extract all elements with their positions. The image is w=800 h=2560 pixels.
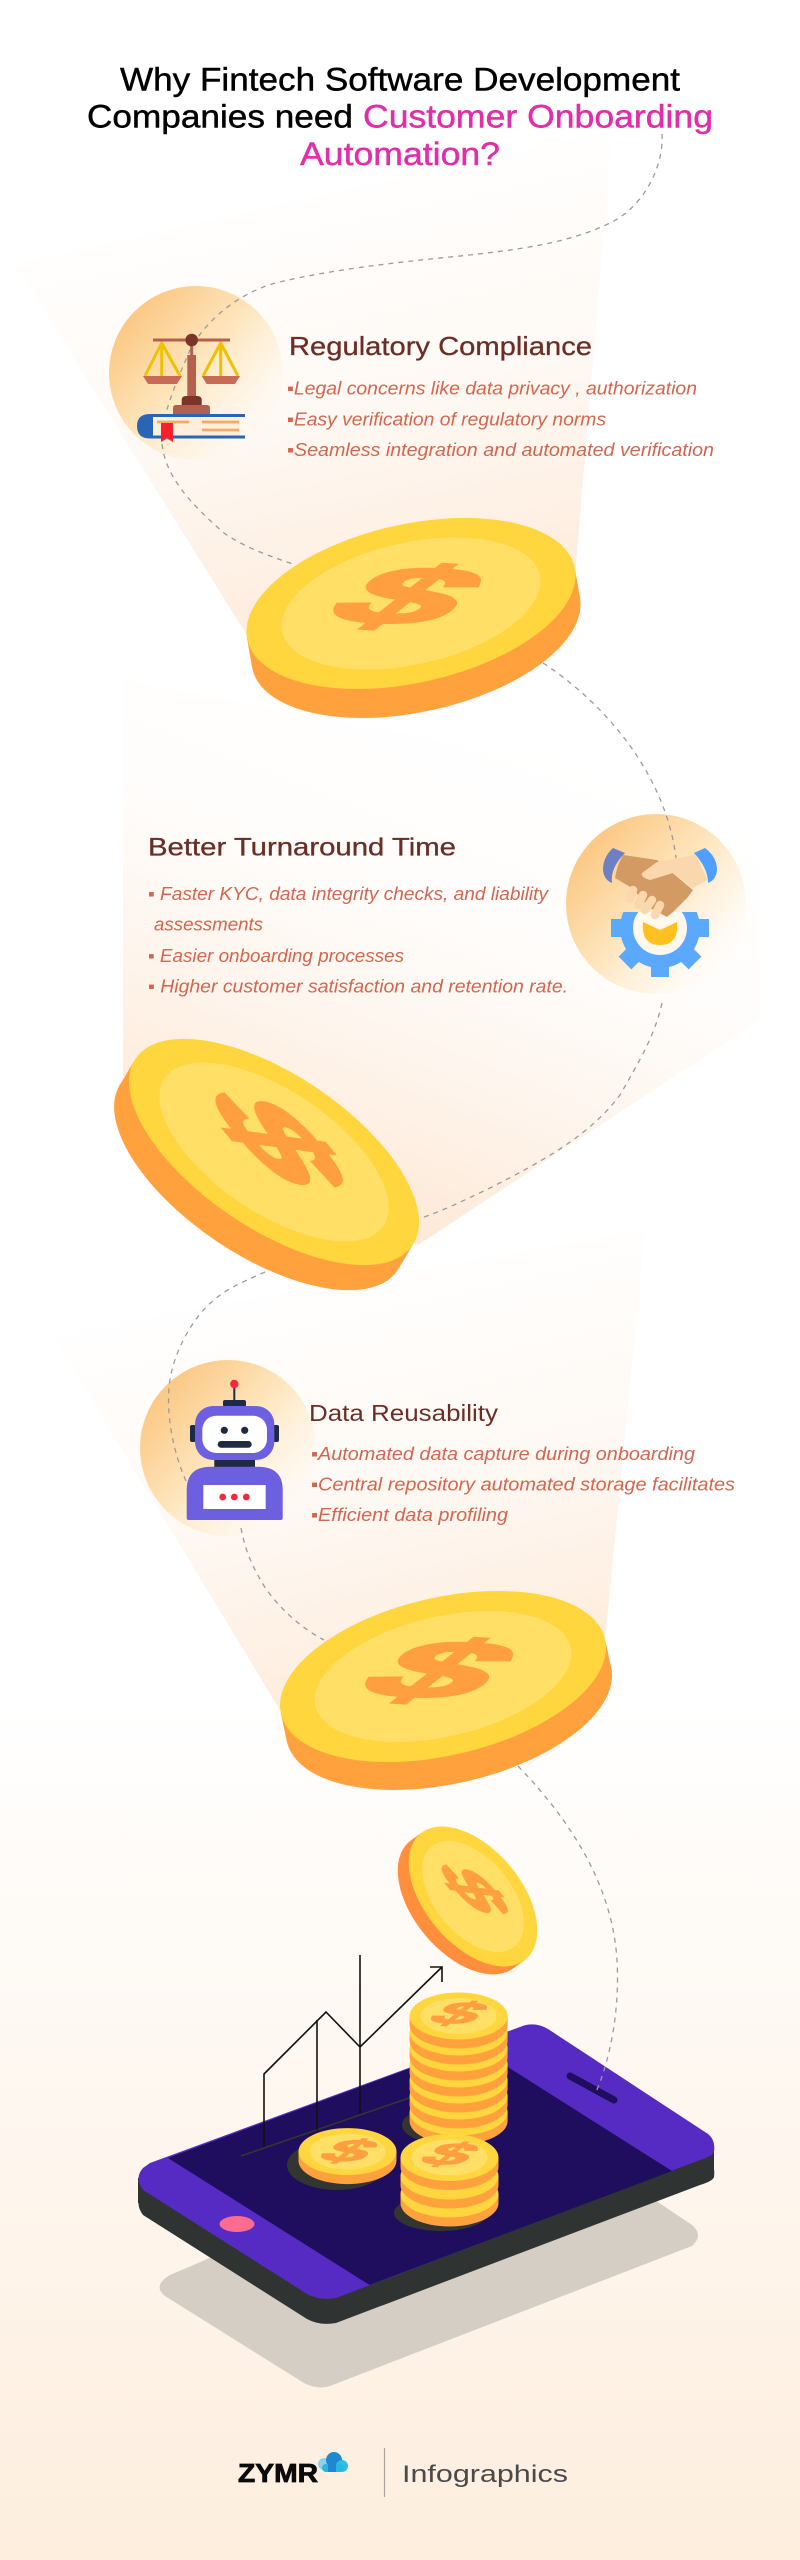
coin 1 [229, 490, 598, 746]
text block: Regulatory Compliance: ▪Seamless integration and automated verification [287, 440, 714, 460]
footer logo: ZYMR Infographics: Infographics [402, 2461, 568, 2488]
text block: Better Turnaround Time: ▪ Higher customer satisfaction and retention rate. [148, 976, 568, 996]
falling coin: $ [419, 1861, 530, 1919]
text block: Better Turnaround Time: ▪ Faster KYC, data integrity checks, and liability [148, 884, 549, 904]
short coin stack: $ [407, 2136, 494, 2172]
coin stack shadows [287, 2107, 488, 2231]
dashed connector to phone [518, 1766, 618, 2092]
title: Why Fintech Software Development [120, 62, 680, 98]
coin 2: $ [172, 1086, 387, 1197]
text block: Data Reusability [309, 1400, 735, 1525]
coin 3: $ [327, 1622, 554, 1717]
falling coin [373, 1802, 562, 1999]
icon: handshake with gear [603, 848, 717, 977]
short coin stack [400, 2134, 498, 2226]
tall coin stack: $ [416, 1995, 503, 2031]
icon backdrop circle 3 [140, 1360, 316, 1536]
single flat coin: $ [306, 2133, 393, 2169]
single flat coin [298, 2128, 396, 2184]
coin 2 [76, 995, 457, 1334]
icon backdrop circle 2 [566, 814, 746, 994]
light beam 3 [51, 1230, 645, 1710]
text block: Better Turnaround Time [148, 834, 568, 996]
text block: Regulatory Compliance: ▪Legal concerns like data privacy , authorization [287, 378, 697, 398]
icon: robot [187, 1380, 283, 1520]
text block: Better Turnaround Time: Better Turnaround Time [148, 834, 456, 862]
light beam 1 [15, 130, 612, 640]
title: Automation? [300, 136, 500, 172]
text block: Data Reusability: ▪Efficient data profiling [311, 1505, 508, 1525]
text block: Data Reusability: Data Reusability [309, 1400, 499, 1426]
line chart with arrow [241, 1955, 442, 2156]
title: Companies need [87, 98, 353, 134]
text block: Regulatory Compliance: ▪Easy verification of regulatory norms [287, 410, 606, 430]
text block: Better Turnaround Time: assessments [154, 914, 263, 934]
icon: scales of justice on a book [137, 334, 245, 442]
text block: Data Reusability: ▪Automated data capture during onboarding [311, 1444, 695, 1464]
text block: Regulatory Compliance [287, 331, 714, 460]
footer logo: ZYMR Infographics: ZYMR [238, 2458, 318, 2488]
icon backdrop circle 1 [109, 286, 283, 460]
dashed connector path [162, 134, 676, 1640]
title [87, 62, 713, 172]
title: Customer Onboarding [363, 98, 713, 134]
footer logo: ZYMR Infographics [238, 2448, 568, 2497]
phone shadow [160, 2190, 698, 2387]
illustration: phone with chart and coins [138, 1802, 714, 2324]
text block: Regulatory Compliance: Regulatory Compliance [289, 331, 592, 361]
light beam 2 [123, 680, 760, 1245]
tall coin stack [410, 1992, 508, 2144]
phone body [138, 2024, 714, 2324]
coin 1: $ [295, 548, 522, 643]
text block: Data Reusability: ▪Central repository automated storage facilitates [311, 1474, 735, 1494]
text block: Better Turnaround Time: ▪ Easier onboarding processes [148, 946, 404, 966]
coin 3 [263, 1562, 629, 1819]
